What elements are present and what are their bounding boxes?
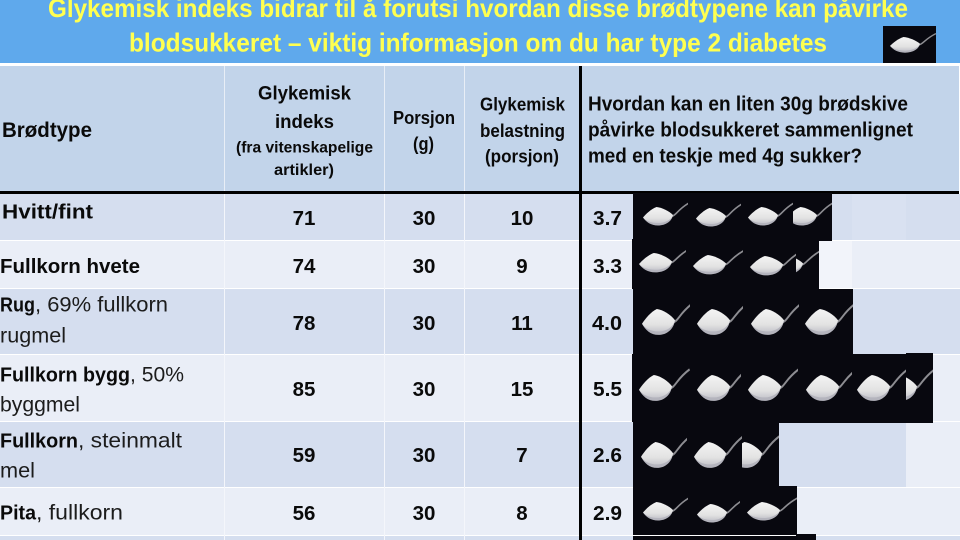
spoons: 2.6 teaspoons: [633, 422, 779, 487]
title banner: blodsukkeret – viktig informasjon om du har type 2 diabetes: [129, 28, 827, 58]
row: Fullkorn bygg: Fullkorn bygg: [0, 364, 130, 387]
row: Fullkorn steinmalt: [0, 428, 622, 482]
row: Rug: Rug: [0, 294, 35, 317]
row: Fullkorn bygg: [0, 363, 622, 417]
row: Fullkorn bygg: 15: [511, 378, 533, 401]
table header row: (fra vitenskapelige: [236, 140, 373, 157]
spoons: 3.3 teaspoons: [632, 239, 821, 290]
spoons: 3.7 teaspoons: [633, 193, 833, 243]
table header row: Brødtype: [2, 119, 92, 142]
row: Hvitt/fint: 30: [413, 207, 435, 230]
row: Fullkorn steinmalt: Fullkorn: [0, 429, 78, 452]
table header row: Porsjon: [393, 108, 455, 128]
row: Fullkorn steinmalt: , steinmalt: [78, 428, 182, 452]
row: Hvitt/fint: [2, 200, 622, 230]
row: Fullkorn bygg: , 50%: [130, 363, 184, 387]
spoons: 4.0 teaspoons: [633, 289, 856, 355]
row: Pita: [0, 500, 622, 525]
row: Fullkorn steinmalt: 59: [293, 444, 315, 467]
spoons: next row, cut off at the page edge: [633, 534, 816, 540]
row: Rug: rugmel: [0, 324, 66, 348]
row: Rug: 78: [293, 312, 315, 335]
table header row: med en teskje med 4g sukker?: [588, 146, 862, 168]
icon: title spoon: [883, 26, 936, 63]
table rule: vertical divider: [579, 66, 582, 540]
table header row: Glykemisk: [258, 82, 351, 104]
table rule: header underline: [0, 191, 959, 194]
row: Pita: , fullkorn: [36, 500, 123, 524]
table header row: (g): [413, 134, 434, 154]
row: Pita: 56: [293, 502, 315, 525]
row: Rug: [0, 293, 622, 348]
row: Hvitt/fint: 10: [511, 207, 533, 230]
table header row: belastning: [480, 121, 565, 141]
row: Fullkorn hvete: 3.3: [593, 255, 622, 278]
row: Fullkorn hvete: [0, 255, 622, 278]
row: Fullkorn hvete: 74: [293, 255, 316, 278]
row: Fullkorn hvete: 30: [413, 255, 435, 278]
table header row: Hvordan kan en liten 30g brødskive: [588, 94, 908, 116]
row: Fullkorn steinmalt: 2.6: [593, 444, 622, 467]
row: Pita: 2.9: [593, 502, 622, 525]
table header row: [0, 66, 959, 191]
row: Rug: 30: [413, 312, 435, 335]
table row backgrounds: [0, 194, 960, 540]
table header row: (porsjon): [485, 147, 559, 167]
row: Fullkorn bygg: byggmel: [0, 393, 80, 417]
row: Pita: 8: [516, 502, 528, 525]
spoons: 2.9 teaspoons: [633, 486, 798, 535]
row: Fullkorn steinmalt: 7: [516, 444, 528, 467]
row: Fullkorn hvete: Fullkorn hvete: [0, 255, 140, 278]
row: Rug: , 69% fullkorn: [35, 293, 168, 317]
spoons: 5.5 teaspoons: [632, 353, 935, 423]
row: Rug: 11: [511, 312, 533, 335]
row: Fullkorn bygg: 5.5: [593, 378, 622, 401]
row: Fullkorn steinmalt: 30: [413, 444, 435, 467]
row: Fullkorn bygg: 30: [413, 378, 435, 401]
row: Rug: 4.0: [592, 312, 622, 335]
row: Fullkorn hvete: 9: [516, 255, 528, 278]
row: Fullkorn steinmalt: mel: [0, 458, 35, 482]
title banner: [0, 0, 960, 63]
row: Pita: Pita: [0, 501, 37, 524]
row: Hvitt/fint: 71: [293, 207, 315, 230]
table header row: indeks: [275, 111, 334, 133]
row: Pita: 30: [413, 502, 435, 525]
table header row: Glykemisk: [480, 95, 566, 115]
table header row: påvirke blodsukkeret sammenlignet: [588, 119, 913, 142]
row: Hvitt/fint: Hvitt/fint: [2, 200, 93, 223]
table header row: artikler): [274, 162, 334, 179]
row: Hvitt/fint: 3.7: [593, 207, 622, 230]
row: Fullkorn bygg: 85: [293, 378, 315, 401]
